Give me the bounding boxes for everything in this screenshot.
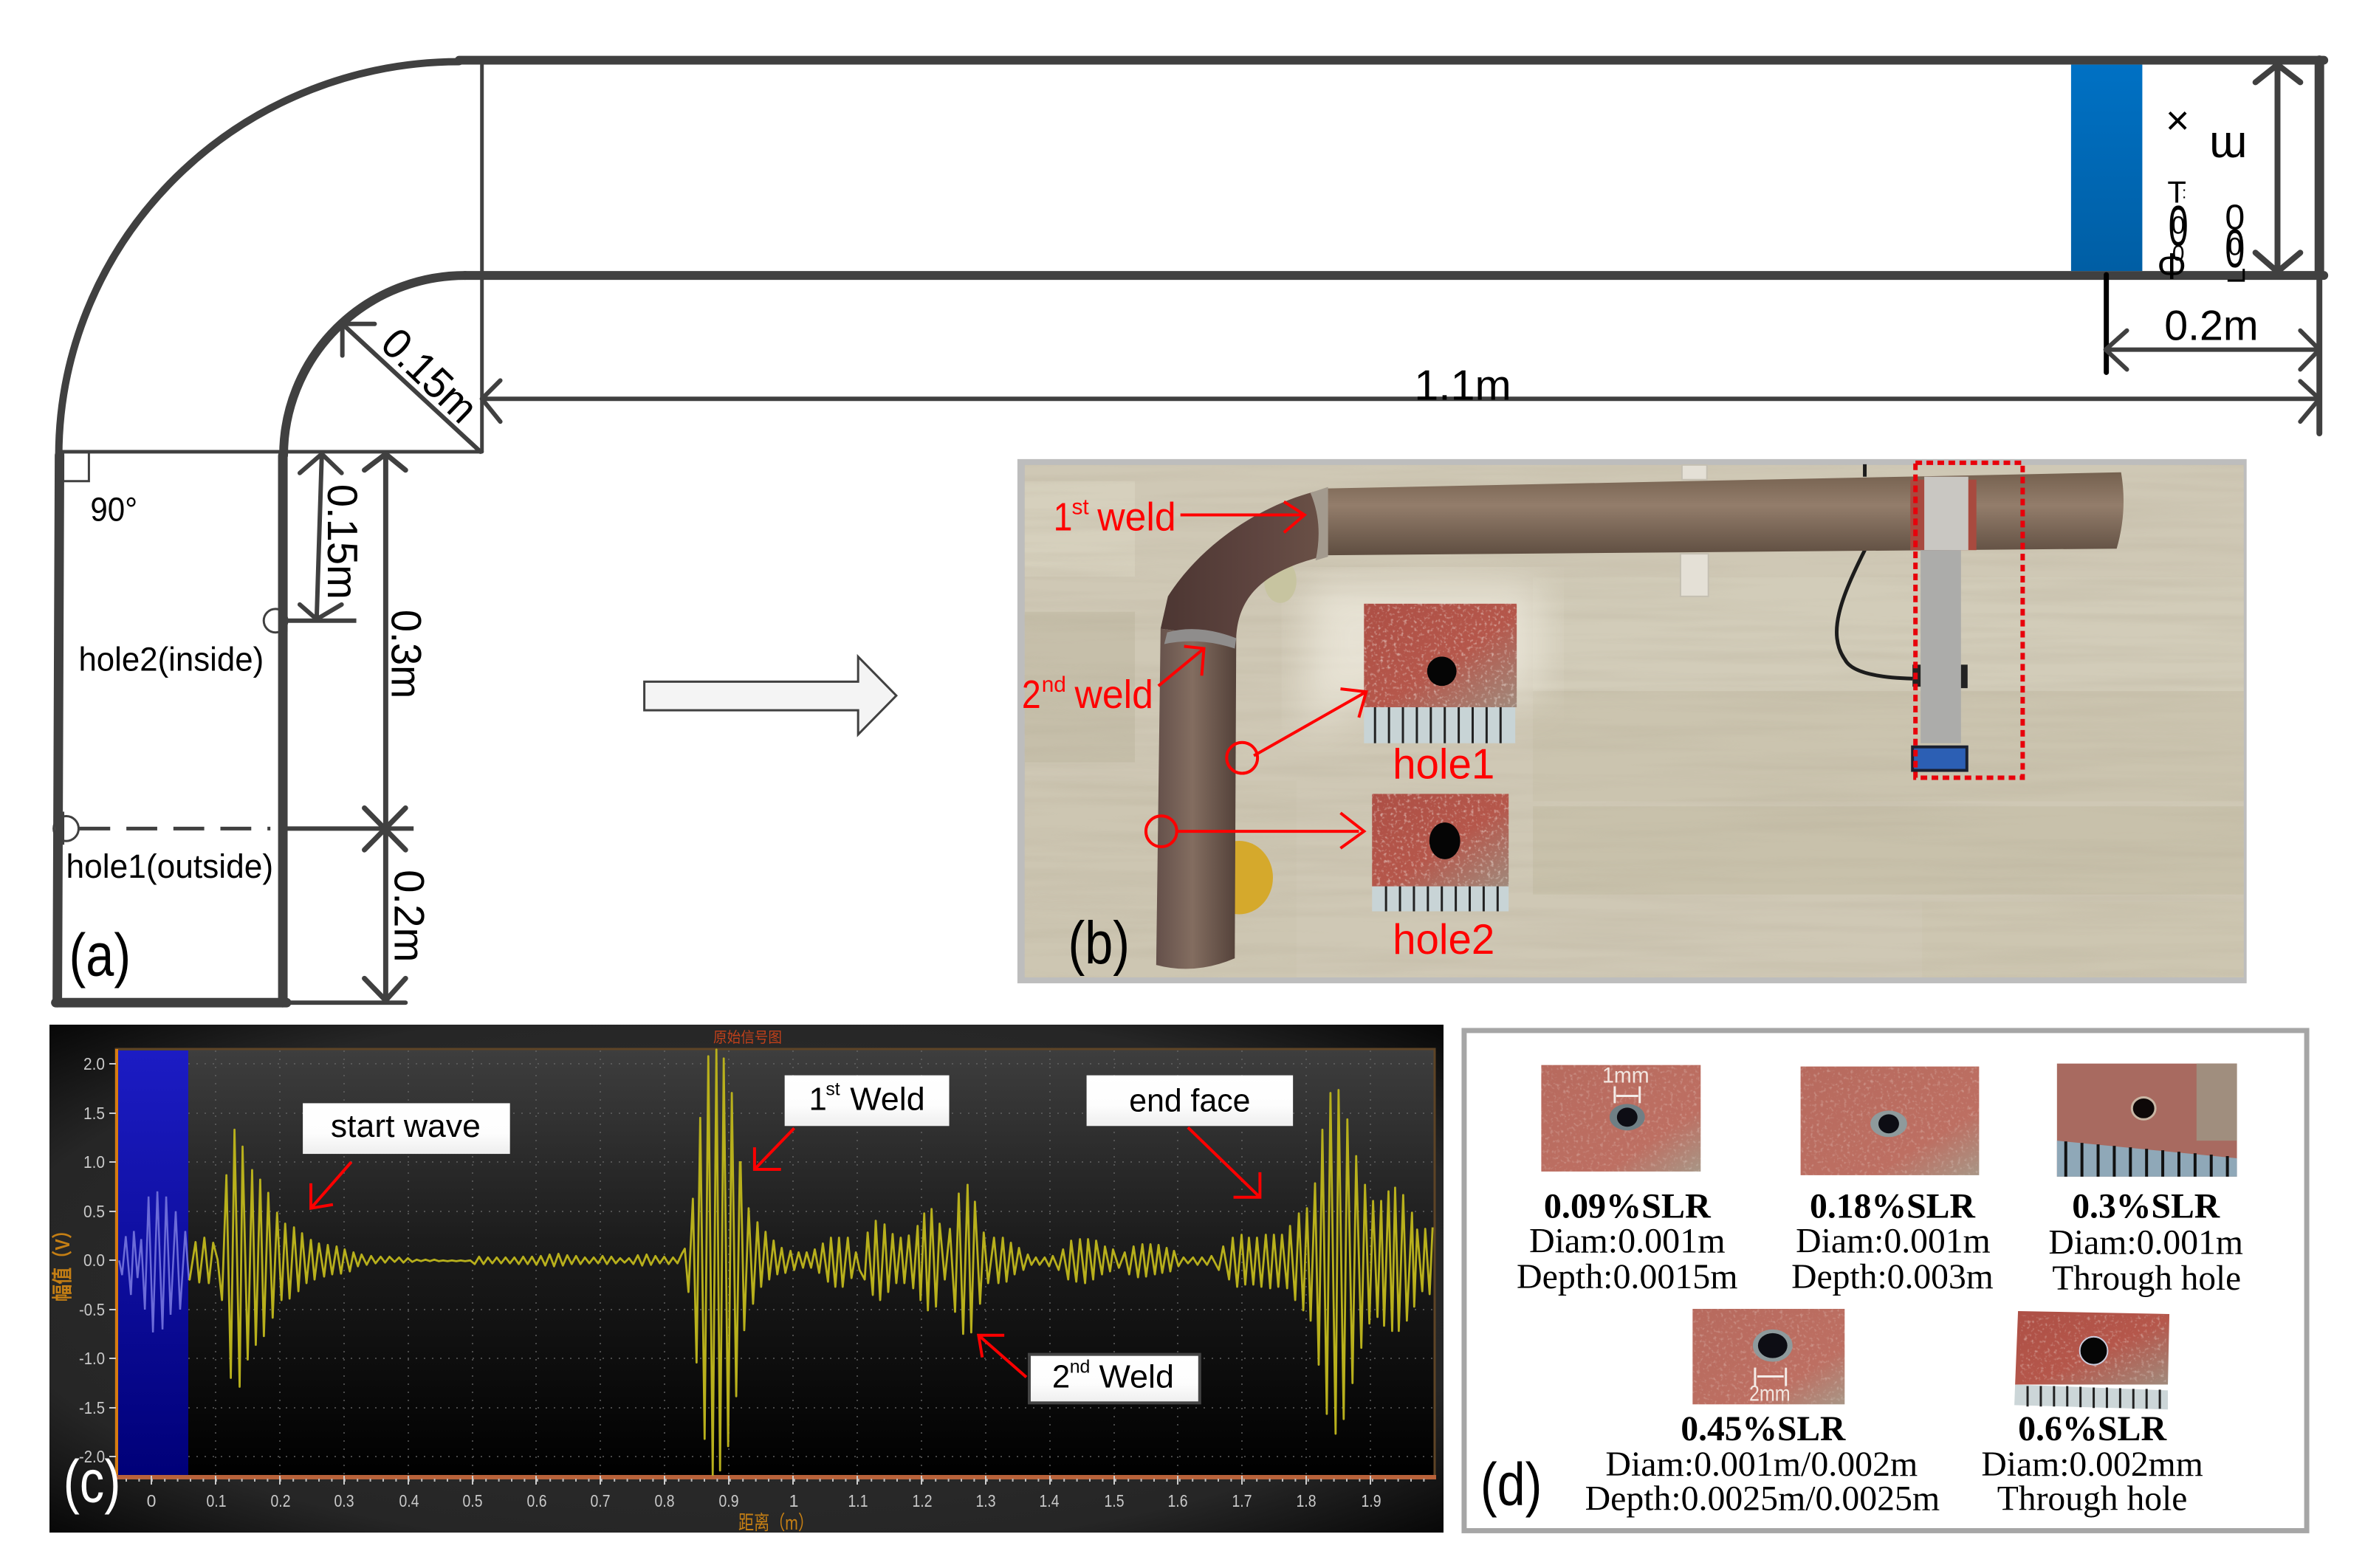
acrylic supports bbox=[1681, 465, 1709, 596]
inset photo: hole1 bbox=[1364, 604, 1517, 743]
cable bbox=[1837, 464, 1912, 678]
support discs bbox=[1205, 559, 1297, 914]
dimension: 0.3m and 0.2m vertical bbox=[365, 454, 432, 1000]
axis titles: 距离（m） bbox=[738, 1512, 814, 1534]
y-axis tick labels: 0.5 bbox=[83, 1202, 105, 1221]
panel: (b) photo of pipe bbox=[1017, 459, 2247, 983]
callout: 1st Weld: 1 bbox=[809, 1081, 827, 1117]
chart background bbox=[49, 1025, 1444, 1533]
callout: 1st Weld: Weld bbox=[850, 1081, 925, 1117]
arrow: schematic to photo bbox=[645, 657, 896, 735]
dimension: 1.1m: 1.1m bbox=[1414, 362, 1511, 409]
y-axis tick labels bbox=[79, 1054, 105, 1466]
callout: 1st Weld bbox=[755, 1076, 950, 1169]
frame bbox=[1464, 1031, 2307, 1530]
hole 2 marker bbox=[264, 455, 357, 633]
callout: 2nd Weld: Weld bbox=[1099, 1358, 1174, 1395]
blue transducer block bbox=[2071, 65, 2142, 271]
caption 0.6%SLR: Diam:0.002mm bbox=[1981, 1445, 2203, 1484]
axis titles: 幅值（V） bbox=[51, 1222, 74, 1301]
y-axis tick labels: -0.5 bbox=[79, 1300, 105, 1319]
garbled rotated size label: T bbox=[2167, 175, 2186, 210]
text: 90 degrees: 90° bbox=[90, 490, 137, 528]
x-axis tick labels: 1.8 bbox=[1297, 1491, 1316, 1510]
panel: (a) pipe schematic bbox=[54, 61, 2324, 1003]
garbled rotated size label: 0 bbox=[2225, 218, 2245, 279]
caption 0.18%SLR bbox=[1791, 1187, 1994, 1296]
callout: hole2 circle and arrow bbox=[1146, 813, 1364, 848]
panel label (b): (b) bbox=[1068, 909, 1130, 977]
garbled rotated size label: 0 bbox=[2225, 198, 2245, 237]
label: 1st weld bbox=[1054, 495, 1305, 539]
x-axis tick labels: 0.8 bbox=[654, 1491, 675, 1510]
caption 0.18%SLR: Depth:0.003m bbox=[1791, 1257, 1994, 1296]
panel label (c): (c) bbox=[63, 1448, 120, 1516]
dimension: 0.2m transducer offset: 0.2m bbox=[2164, 303, 2259, 350]
callout: 1st Weld: st bbox=[825, 1079, 840, 1099]
dimension: 1.1m bbox=[482, 275, 2319, 433]
grid bbox=[188, 1051, 1435, 1475]
dimension: 0.15m radius: 0.15m bbox=[372, 320, 487, 433]
x-axis tick labels: 1 bbox=[789, 1491, 798, 1510]
pipe outline bbox=[56, 61, 2324, 1003]
caption 0.3%SLR: 0.3%SLR bbox=[2072, 1187, 2220, 1226]
dimension: 0.15m vertical bbox=[300, 454, 365, 619]
caption 0.6%SLR bbox=[1981, 1409, 2203, 1519]
label: 1st weld: 1 bbox=[1054, 495, 1072, 539]
x-axis tick labels: 0.3 bbox=[334, 1491, 354, 1510]
y-axis tick labels: 1.0 bbox=[83, 1152, 105, 1172]
garbled rotated size label: 0 bbox=[2172, 241, 2184, 266]
dimension: pipe diameter arrow bbox=[2256, 65, 2300, 272]
callout: end face bbox=[1087, 1076, 1293, 1197]
garbled rotated size label: 0 bbox=[2169, 194, 2189, 258]
x-axis tick labels: 0.2 bbox=[270, 1491, 291, 1510]
defect photo 0.45%SLR: 2mm bbox=[1749, 1381, 1791, 1406]
text: hole1: hole1 bbox=[1393, 740, 1494, 788]
defect photo 0.09%SLR bbox=[1541, 1064, 1700, 1172]
caption 0.09%SLR: 0.09%SLR bbox=[1544, 1187, 1711, 1226]
garbled rotated size label: m bbox=[2209, 123, 2248, 173]
red dashed box around sensor bbox=[1915, 463, 2022, 777]
caption 0.45%SLR bbox=[1585, 1409, 1940, 1519]
garbled rotated size label: : bbox=[2182, 184, 2186, 202]
garbled rotated size label: 0 bbox=[2228, 233, 2242, 261]
x-axis tick labels: 1.6 bbox=[1168, 1491, 1187, 1510]
label: 1st weld: weld bbox=[1096, 495, 1176, 539]
callout: start wave: start wave bbox=[331, 1108, 481, 1144]
x-axis tick labels: 0 bbox=[147, 1491, 156, 1510]
dimension: 0.15m vertical: 0.15m bbox=[318, 484, 365, 599]
y-axis tick labels: 1.5 bbox=[83, 1104, 105, 1123]
x-axis tick labels: 0.4 bbox=[399, 1491, 419, 1510]
caption 0.45%SLR: 0.45%SLR bbox=[1681, 1409, 1846, 1448]
label: 2nd weld bbox=[1022, 646, 1204, 717]
caption 0.6%SLR: Through hole bbox=[1997, 1479, 2187, 1519]
dimension: 0.3m and 0.2m vertical: 0.2m bbox=[385, 870, 432, 962]
caption 0.18%SLR: 0.18%SLR bbox=[1810, 1187, 1975, 1226]
callout: hole1 circle and arrow bbox=[1226, 689, 1366, 774]
waveform in blue band bbox=[119, 1192, 189, 1333]
callout: start wave bbox=[303, 1103, 510, 1208]
y-axis tick labels: -1.5 bbox=[79, 1398, 105, 1417]
y-axis tick labels: -2.0 bbox=[79, 1447, 105, 1466]
garbled rotated size label: × bbox=[2166, 97, 2189, 143]
x-axis tick labels: 1.7 bbox=[1232, 1491, 1252, 1510]
defect photo 0.45%SLR bbox=[1692, 1309, 1844, 1406]
callout: 2nd Weld: nd bbox=[1070, 1357, 1090, 1378]
defect photo 0.18%SLR bbox=[1801, 1067, 1979, 1175]
callout: 2nd Weld bbox=[978, 1335, 1200, 1403]
text: hole2 inside: hole2(inside) bbox=[78, 640, 264, 678]
dimension: 0.15m radius bbox=[343, 320, 487, 452]
y-axis tick labels: 0.0 bbox=[83, 1251, 105, 1270]
steel pipe bbox=[1156, 472, 2124, 969]
panel: (c) waveform chart bbox=[49, 1025, 1444, 1534]
text: hole1 outside: hole1(outside) bbox=[66, 847, 273, 885]
x-axis tick labels: 1.4 bbox=[1040, 1491, 1060, 1510]
waveform yellow trace, part 2 bbox=[741, 1090, 1432, 1434]
caption 0.6%SLR: 0.6%SLR bbox=[2018, 1409, 2167, 1448]
label: 2nd weld: 2 bbox=[1022, 673, 1041, 717]
x-axis tick labels bbox=[147, 1491, 1381, 1510]
x-axis tick labels: 1.3 bbox=[976, 1491, 995, 1510]
hole 1 marker with dashed line bbox=[54, 811, 413, 845]
text: hole2: hole2 bbox=[1393, 916, 1494, 963]
caption 0.3%SLR: Diam:0.001m bbox=[2048, 1223, 2243, 1262]
panel label (a): (a) bbox=[69, 921, 131, 988]
x-axis tick labels: 0.9 bbox=[719, 1491, 738, 1510]
defect photo 0.6%SLR bbox=[2014, 1311, 2169, 1409]
caption 0.18%SLR: Diam:0.001m bbox=[1796, 1221, 1991, 1260]
inset photo: hole2 bbox=[1372, 794, 1508, 911]
waveform and callouts, right part bbox=[741, 1076, 1432, 1434]
x-axis tick labels: 0.1 bbox=[207, 1491, 226, 1510]
panel label (d): (d) bbox=[1480, 1451, 1542, 1519]
axis titles: 原始信号图 bbox=[713, 1029, 782, 1046]
x-axis tick labels: 1.1 bbox=[848, 1491, 868, 1510]
label: 1st weld: st bbox=[1071, 495, 1089, 519]
waveform and callouts, left part bbox=[63, 1050, 740, 1516]
garbled rotated size label bbox=[2157, 97, 2248, 287]
x-axis tick labels: 1.5 bbox=[1105, 1491, 1124, 1510]
x-axis tick labels: 0.7 bbox=[591, 1491, 610, 1510]
blue start band bbox=[117, 1051, 188, 1475]
caption 0.45%SLR: Depth:0.0025m/0.0025m bbox=[1585, 1479, 1940, 1519]
axis titles bbox=[51, 1029, 814, 1534]
x-axis tick labels: 1.9 bbox=[1362, 1491, 1381, 1510]
caption 0.3%SLR: Through hole bbox=[2052, 1259, 2241, 1298]
callout: end face: end face bbox=[1129, 1082, 1250, 1118]
defect photo 0.3%SLR bbox=[2057, 1064, 2237, 1177]
garbled rotated size label: 0 bbox=[2172, 211, 2186, 239]
caption 0.09%SLR: Diam:0.001m bbox=[1529, 1221, 1726, 1260]
y-axis tick labels: -1.0 bbox=[79, 1349, 105, 1368]
panel: (d) defect photos bbox=[1464, 1031, 2307, 1530]
dimension: 0.3m and 0.2m vertical: 0.3m bbox=[382, 610, 429, 698]
caption 0.45%SLR: Diam:0.001m/0.002m bbox=[1605, 1445, 1918, 1484]
waveform yellow trace, part 1 bbox=[189, 1050, 740, 1475]
dimension: 0.2m transducer offset bbox=[2106, 275, 2319, 372]
label: 2nd weld: nd bbox=[1042, 673, 1066, 697]
plot area bbox=[116, 1049, 1435, 1476]
caption 0.09%SLR: Depth:0.0015m bbox=[1517, 1257, 1738, 1296]
y-axis tick labels: 2.0 bbox=[83, 1054, 105, 1073]
caption 0.3%SLR bbox=[2048, 1187, 2243, 1298]
label: 2nd weld: weld bbox=[1074, 673, 1153, 717]
photo frame bbox=[1017, 459, 2247, 983]
garbled rotated size label: Φ bbox=[2157, 246, 2186, 287]
x-axis tick labels: 0.5 bbox=[462, 1491, 483, 1510]
wood floor bbox=[1025, 465, 2244, 977]
sensor collar and cable strip bbox=[1910, 477, 1977, 771]
caption 0.09%SLR bbox=[1517, 1187, 1738, 1296]
callout: 2nd Weld: 2 bbox=[1052, 1358, 1070, 1395]
x-axis tick labels: 1.2 bbox=[913, 1491, 932, 1510]
x-axis tick labels: 0.6 bbox=[527, 1491, 546, 1510]
axes bbox=[109, 1049, 1436, 1485]
defect photo 0.09%SLR: 1mm bbox=[1602, 1064, 1650, 1088]
